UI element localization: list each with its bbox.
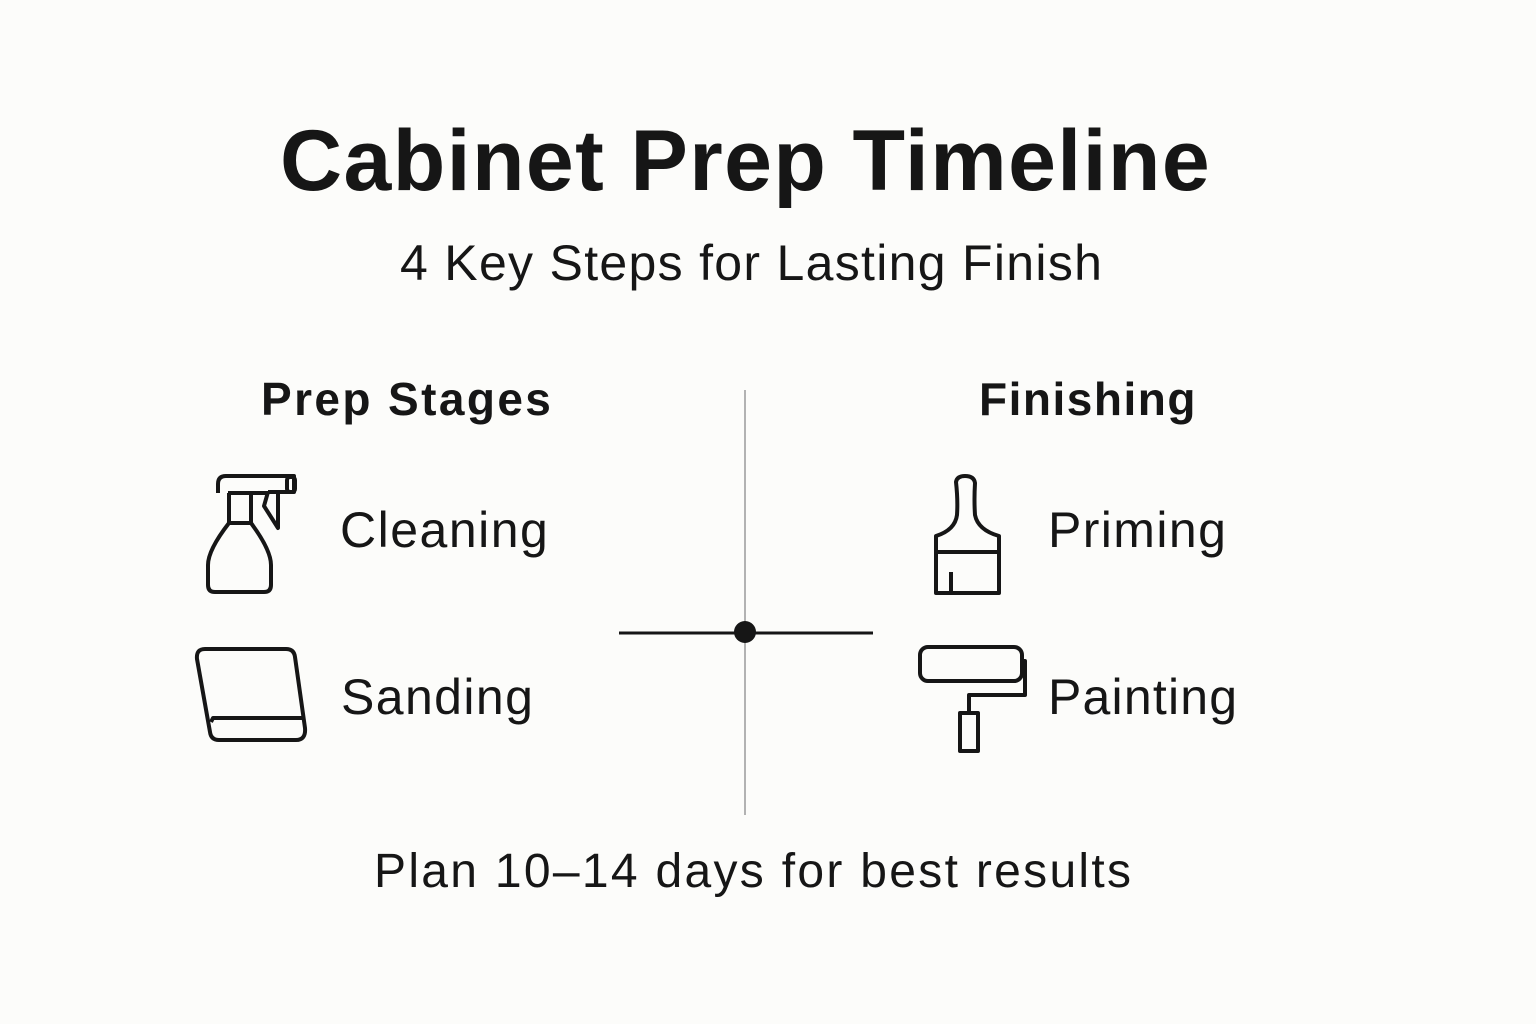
subtitle: 4 Key Steps for Lasting Finish — [400, 235, 1103, 291]
label: painting: Painting — [1048, 669, 1238, 725]
timeline axis — [619, 390, 873, 815]
icon: sanding block — [197, 649, 305, 740]
icon: paint roller — [920, 647, 1025, 751]
footer note: Plan 10–14 days for best results — [374, 845, 1133, 898]
heading: prep stages: Prep Stages — [261, 373, 553, 425]
icon: paint brush — [936, 476, 999, 593]
heading: finishing: Finishing — [979, 373, 1197, 425]
title: Cabinet Prep Timeline — [280, 113, 1211, 209]
label: sanding: Sanding — [341, 669, 534, 725]
label: priming: Priming — [1048, 502, 1227, 558]
icon: spray bottle — [208, 476, 295, 592]
label: cleaning: Cleaning — [340, 502, 549, 558]
